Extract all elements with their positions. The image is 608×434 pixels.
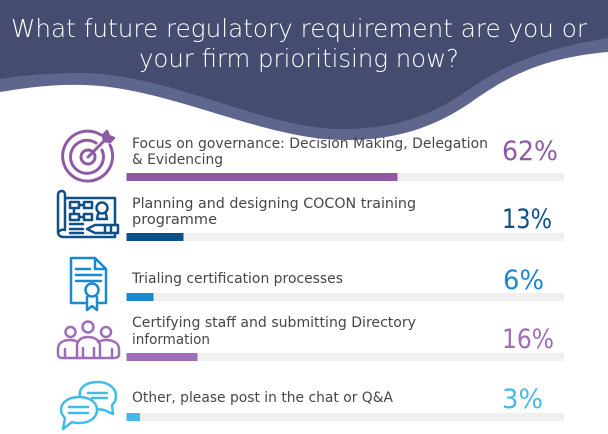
label [132,196,416,228]
label: & Evidencing [132,152,223,168]
title [11,14,588,73]
bar [126,233,564,241]
icon: target [63,131,114,181]
label [132,315,416,348]
row 1: governance [63,131,564,181]
header wave [0,0,608,129]
value: 3% [502,384,543,415]
label: Certifying staff and submitting Directory [132,315,416,331]
bar [126,293,564,301]
label: programme [132,212,217,228]
icon: blueprint [58,191,118,237]
value: 16% [502,324,554,355]
label: Other, please post in the chat or Q&A [132,390,393,406]
bar [126,173,564,181]
row 3: certification [71,258,564,310]
header wave band [0,0,608,140]
label: Focus on governance: Decision Making, Delegation [132,136,488,152]
row 5: other [61,382,564,429]
value: 62% [502,136,558,167]
icon: people [58,322,119,358]
value: 6% [503,265,544,296]
row 4: certifying staff [58,315,564,361]
icon: certificate [71,258,106,310]
label [132,136,488,168]
row 2: COCON [58,191,564,241]
label: Planning and designing COCON training [132,196,416,212]
label: information [132,332,210,348]
label: Trialing certification processes [131,271,343,287]
title: What future regulatory requirement are you or [11,14,588,43]
icon: chat bubbles [61,382,116,429]
bar [126,353,564,361]
bar [126,413,564,421]
title: your firm prioritising now? [139,44,459,73]
value: 13% [502,204,552,235]
